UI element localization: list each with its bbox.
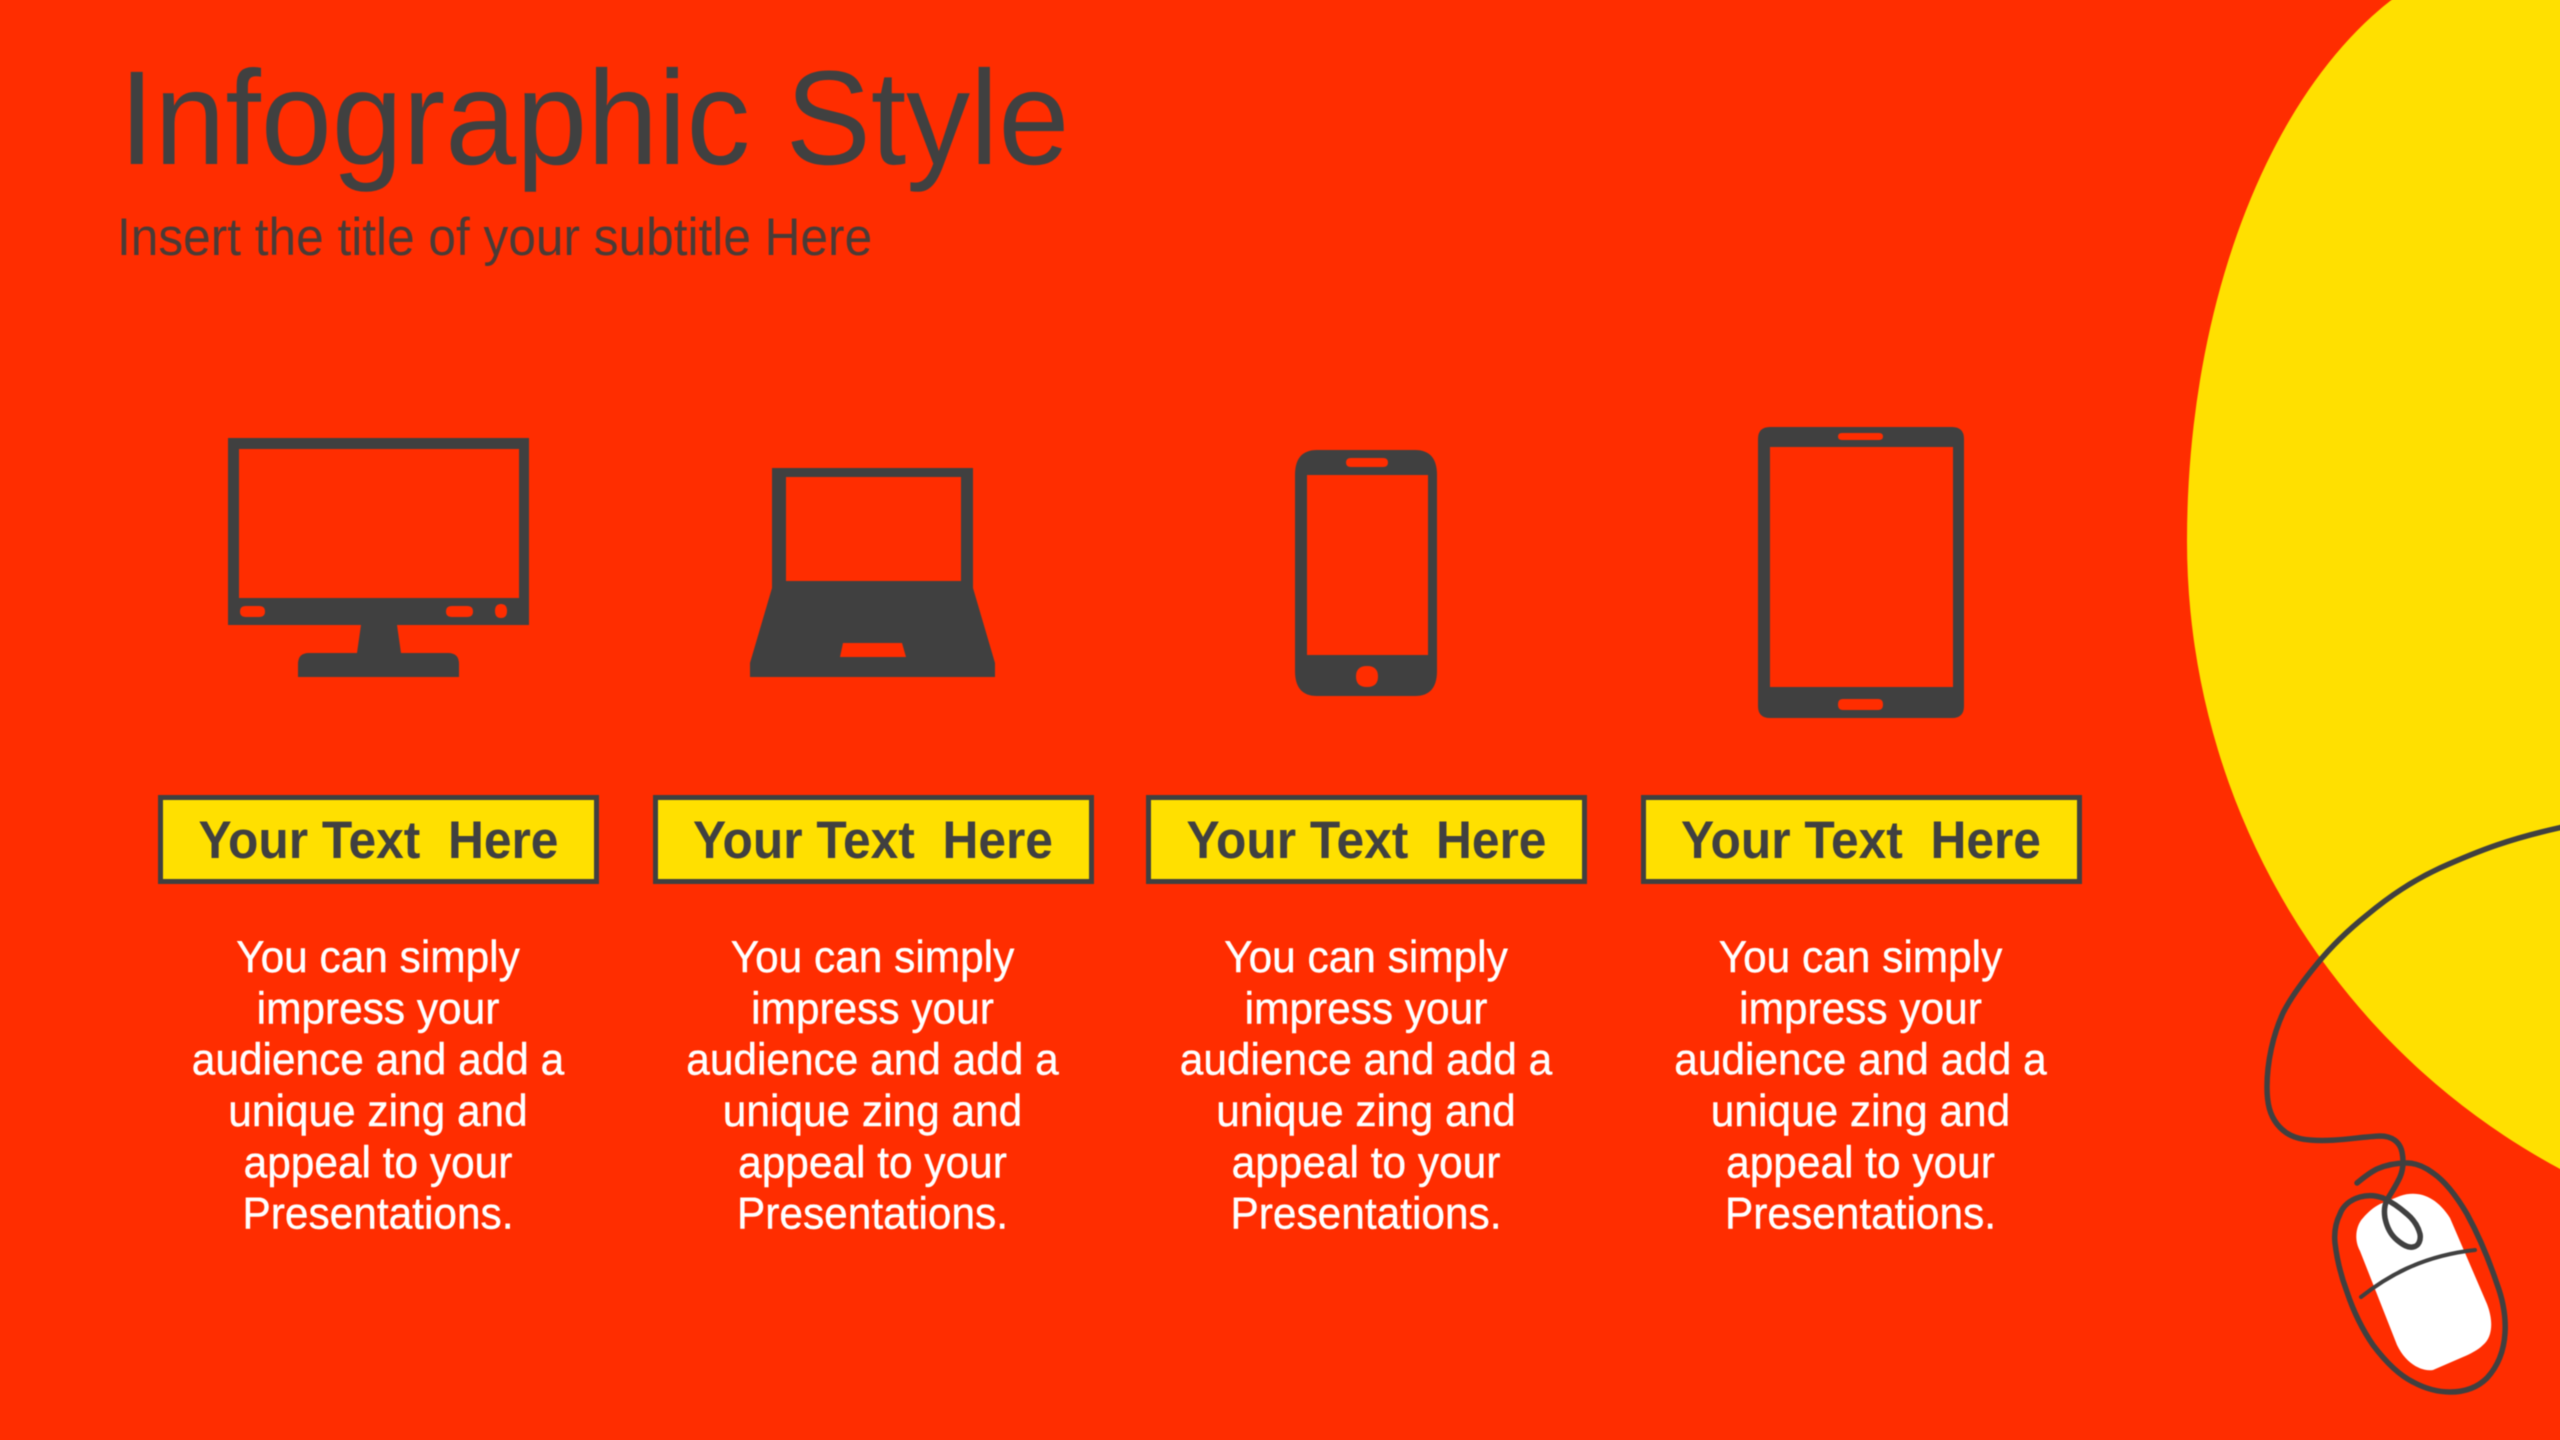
description: tablet: audience and add a <box>1674 1036 2048 1085</box>
description: monitor: unique zing and <box>228 1087 528 1136</box>
panel: monitor <box>160 438 596 1239</box>
label: laptop <box>656 798 1092 882</box>
subtitle: Insert the title of your subtitle Here <box>117 208 872 266</box>
label: tablet <box>1644 798 2080 882</box>
description: laptop: audience and add a <box>686 1036 1060 1085</box>
icon: smartphone <box>1295 450 1437 696</box>
description: monitor: audience and add a <box>192 1036 565 1085</box>
panel: phone <box>1148 450 1584 1239</box>
label: phone: Your Text Here <box>1187 811 1546 869</box>
description: laptop: impress your <box>751 984 994 1034</box>
description: monitor: appeal to your <box>244 1138 512 1188</box>
description: laptop: appeal to your <box>738 1138 1007 1188</box>
description: laptop: unique zing and <box>723 1087 1022 1136</box>
icon: desktop monitor <box>228 438 529 677</box>
description: tablet: unique zing and <box>1711 1087 2010 1136</box>
panel: laptop <box>656 468 1092 1239</box>
title: Infographic Style <box>119 43 1069 193</box>
icon: computer mouse with cord <box>2267 825 2560 1392</box>
label: monitor <box>160 798 596 882</box>
mouse cord and outline <box>2267 825 2560 1392</box>
description: tablet: Presentations. <box>1725 1190 1996 1239</box>
description: tablet: appeal to your <box>1726 1138 1995 1188</box>
description: phone: audience and add a <box>1180 1036 1553 1085</box>
description: laptop: Presentations. <box>737 1190 1008 1239</box>
label: tablet: Your Text Here <box>1681 811 2041 869</box>
description: monitor: impress your <box>257 984 499 1034</box>
mouse button divider <box>2361 1250 2475 1297</box>
icon: laptop <box>750 468 995 677</box>
description: tablet: impress your <box>1739 984 1982 1034</box>
yellow curved shape <box>2187 0 2560 1251</box>
description: laptop: You can simply <box>731 933 1015 982</box>
label: phone <box>1148 798 1584 882</box>
description: phone: appeal to your <box>1232 1138 1500 1188</box>
mouse body <box>2356 1194 2491 1370</box>
description: phone: unique zing and <box>1216 1087 1516 1136</box>
description: phone: impress your <box>1245 984 1487 1034</box>
panel: tablet <box>1644 427 2080 1239</box>
description: phone: You can simply <box>1224 933 1508 982</box>
label: laptop: Your Text Here <box>693 811 1053 869</box>
label: monitor: Your Text Here <box>199 811 558 869</box>
description: monitor: You can simply <box>236 933 520 982</box>
description: tablet: You can simply <box>1719 933 2003 982</box>
description: monitor: Presentations. <box>242 1190 514 1239</box>
description: phone: Presentations. <box>1230 1190 1502 1239</box>
icon: tablet <box>1758 427 1964 718</box>
